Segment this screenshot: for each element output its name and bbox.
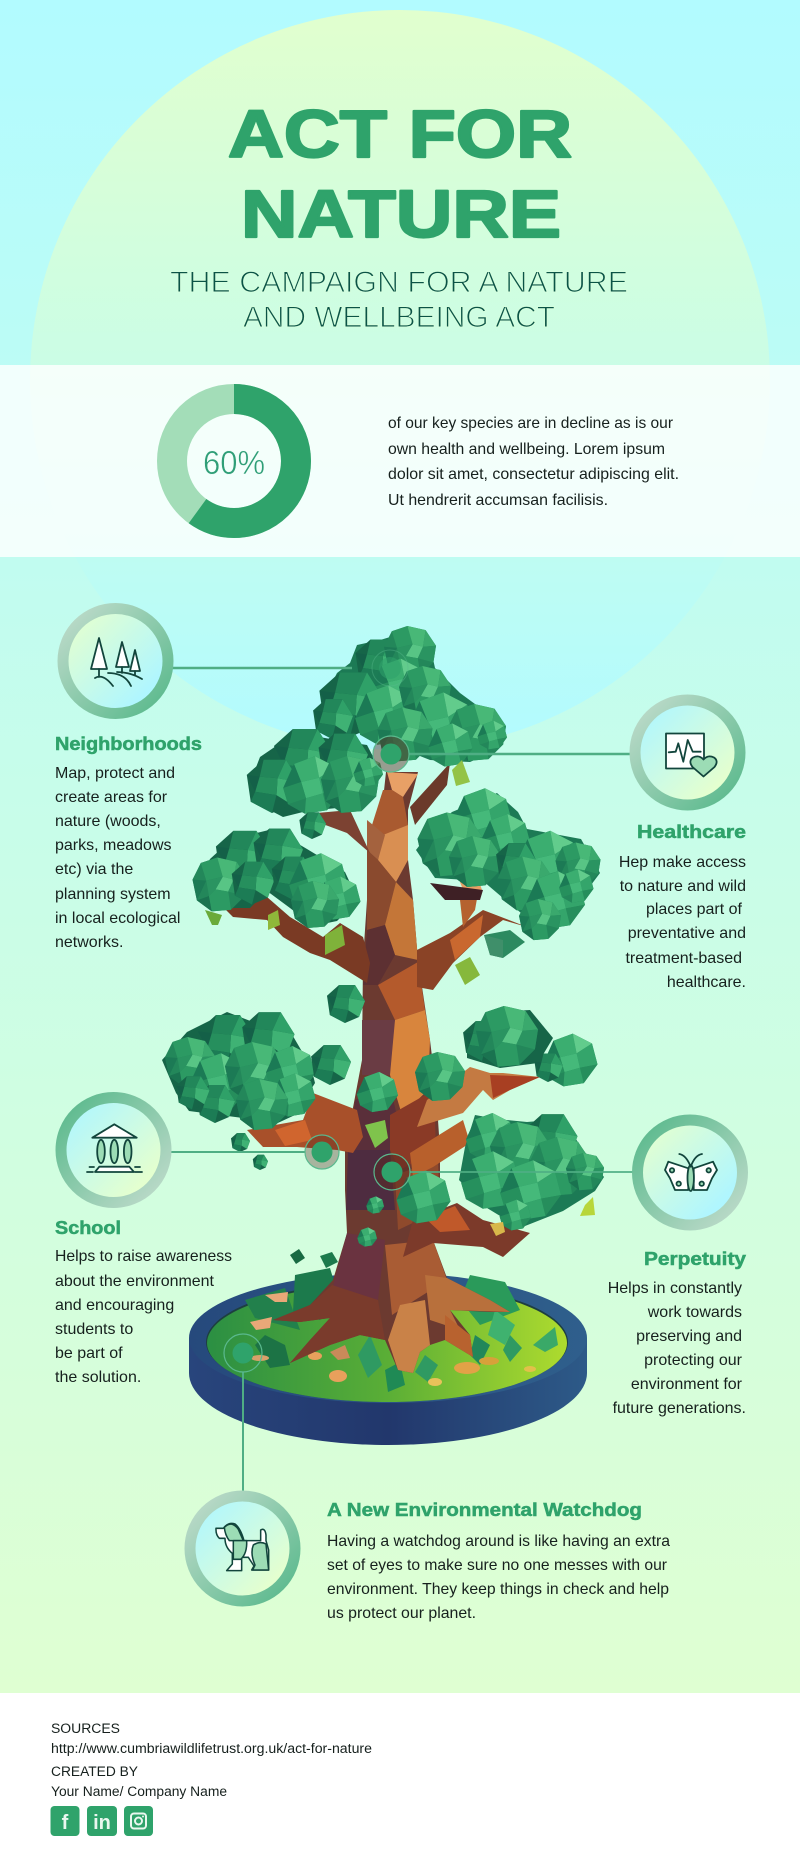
statistic band [0, 365, 800, 557]
statistic description: own health and wellbeing. Lorem ipsum [388, 441, 665, 458]
heading: neighborhoods: Neighborhoods [55, 734, 202, 754]
text: neighborhoods: Map, protect and [55, 765, 175, 782]
panel: healthcare [619, 700, 746, 991]
donut chart 60% [172, 399, 296, 523]
sources and credits: http://www.cumbriawildlifetrust.org.uk/act-for-nature [51, 1741, 372, 1757]
foliage: upper left [247, 729, 383, 817]
foliage: top crown [313, 626, 507, 767]
marker: neighborhoods [165, 650, 408, 686]
title: NATURE [241, 177, 561, 252]
marker: watchdog [224, 1334, 262, 1500]
statistic description: Ut hendrerit accumsan facilisis. [388, 492, 608, 509]
text: watchdog: Having a watchdog around is like having an extra [327, 1533, 670, 1550]
text: perpetuity: preserving and [636, 1328, 742, 1345]
donut chart 60%: 60% [203, 444, 265, 481]
footer panel [0, 1693, 800, 1864]
text: school: the solution. [55, 1369, 141, 1386]
text: watchdog: us protect our planet. [327, 1605, 476, 1622]
statistic description [388, 415, 679, 509]
subtitle: THE CAMPAIGN FOR A NATURE [170, 266, 628, 299]
panel: perpetuity [608, 1120, 746, 1417]
panel: watchdog [190, 1496, 670, 1622]
branches [223, 763, 540, 1257]
text: perpetuity: Helps in constantly [608, 1280, 742, 1297]
icon: classical building [61, 1098, 166, 1202]
text: school: Helps to raise awareness [55, 1248, 232, 1265]
sources and credits: Your Name/ Company Name [51, 1784, 227, 1800]
text: healthcare: healthcare. [667, 974, 746, 991]
text: neighborhoods: nature (woods, [55, 813, 161, 830]
icon: butterfly [638, 1120, 742, 1225]
text: neighborhoods: planning system [55, 886, 171, 903]
text: watchdog [327, 1533, 670, 1622]
text: neighborhoods: parks, meadows [55, 837, 172, 854]
social icons [50, 1806, 153, 1836]
icon: trees [63, 608, 168, 714]
text: neighborhoods: networks. [55, 934, 123, 951]
text: neighborhoods [55, 765, 180, 951]
heading: healthcare: Healthcare [637, 822, 746, 842]
statistic description: of our key species are in decline as is our [388, 415, 674, 432]
text: healthcare: Hep make access [619, 854, 746, 871]
text: perpetuity: future generations. [613, 1400, 746, 1417]
heading: perpetuity: Perpetuity [644, 1249, 746, 1269]
ground leaves and stones [245, 1249, 558, 1392]
planter base [189, 1273, 587, 1445]
marker: healthcare [373, 736, 640, 772]
subtitle [170, 266, 628, 334]
text: school: students to [55, 1321, 133, 1338]
text: healthcare: places part of [646, 901, 743, 918]
text: perpetuity: protecting our [644, 1352, 743, 1369]
text: perpetuity: work towards [647, 1304, 742, 1321]
heading: watchdog: A New Environmental Watchdog [327, 1500, 642, 1520]
title [228, 97, 572, 252]
large background circle [30, 10, 770, 750]
foliage: lower right [459, 1113, 604, 1236]
text: school [55, 1248, 232, 1386]
text: healthcare: treatment-based [625, 950, 742, 967]
panel: neighborhoods [55, 608, 202, 951]
sources and credits: CREATED BY [51, 1764, 139, 1780]
text: watchdog: set of eyes to make sure no one messes with our [327, 1557, 668, 1574]
subtitle: AND WELLBEING ACT [243, 301, 555, 334]
marker: perpetuity [374, 1154, 645, 1190]
title: ACT FOR [228, 97, 572, 172]
foliage: lower left [162, 1012, 351, 1170]
text: neighborhoods: etc) via the [55, 861, 133, 878]
icon: instagram [124, 1806, 153, 1836]
text: school: and encouraging [55, 1297, 174, 1314]
marker: school [160, 1135, 339, 1169]
panel: school [55, 1098, 232, 1386]
text: healthcare: preventative and [628, 925, 746, 942]
foliage: centre clumps [357, 1052, 465, 1247]
text: school: about the environment [55, 1273, 215, 1290]
text: healthcare: to nature and wild [620, 878, 746, 895]
trunk [273, 772, 510, 1373]
tree illustration [162, 626, 604, 1445]
icon: dog [190, 1496, 295, 1601]
sources and credits: SOURCES [51, 1721, 120, 1737]
foliage: small right sprig and chips [205, 760, 525, 1023]
text: school: be part of [55, 1345, 123, 1362]
foliage: middle right [416, 788, 600, 940]
icon: linkedin: in [93, 1812, 111, 1834]
text: neighborhoods: in local ecological [55, 910, 180, 927]
text: watchdog: environment. They keep things in check and help [327, 1581, 669, 1598]
icon: facebook: f [62, 1812, 69, 1834]
connector lines and tree markers [160, 650, 645, 1500]
text: neighborhoods: create areas for [55, 789, 168, 806]
text: perpetuity: environment for [631, 1376, 743, 1393]
statistic description: dolor sit amet, consectetur adipiscing elit. [388, 466, 679, 483]
heading: school: School [55, 1218, 121, 1238]
foliage: upper right [463, 1006, 598, 1086]
text: perpetuity [608, 1280, 746, 1417]
sources and credits [51, 1721, 372, 1800]
text: healthcare [619, 854, 746, 991]
icon: heart monitor [635, 700, 740, 805]
foliage: middle left [192, 829, 360, 928]
